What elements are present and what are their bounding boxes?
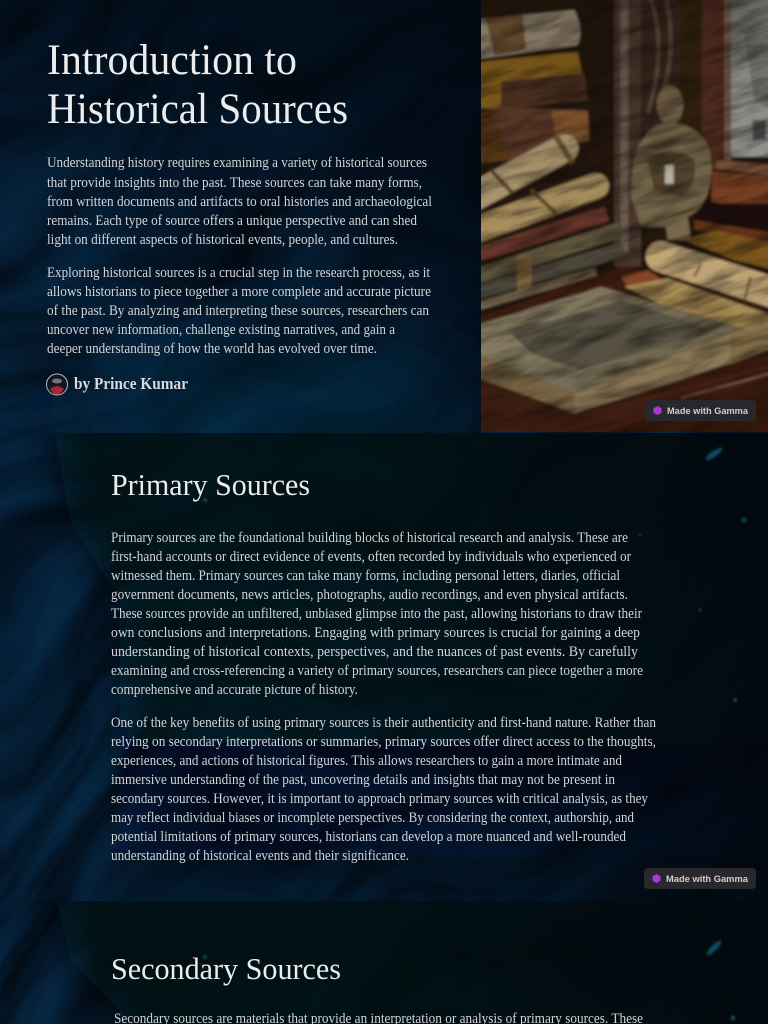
- statue: [657, 86, 683, 124]
- text block: intro paragraph 1: Understanding history requires examining a variety of historical sources: [47, 155, 427, 171]
- text block: intro paragraph 2: Exploring historical sources is a crucial step in the research process, as it: [47, 265, 430, 281]
- text block: intro paragraph 1: [47, 155, 432, 248]
- badge: made with gamma (middle): [644, 868, 756, 889]
- title: [47, 37, 348, 133]
- title: Introduction to: [47, 37, 297, 84]
- icon: gamma logo: [654, 406, 662, 415]
- text block: primary paragraph 1: witnessed them. Primary sources can take many forms, including personal letters, diaries, official: [111, 568, 620, 584]
- text block: primary paragraph 2: [111, 715, 657, 864]
- panel: secondary sources backdrop: [45, 901, 768, 1024]
- text block: primary paragraph 2: may reflect individual biases or incomplete perspectives. By considering the context, authorship, and: [111, 810, 635, 826]
- heading: primary sources: Primary Sources: [111, 467, 310, 502]
- text block: primary paragraph 2: understanding of historical events and their significance.: [111, 848, 409, 864]
- text block: intro paragraph 1: that provide insights into the past. These sources can take many forms,: [47, 175, 422, 191]
- text block: primary paragraph 1: Primary sources are the foundational building blocks of historical research and analysis. These are: [111, 530, 628, 546]
- text block: intro paragraph 2: of the past. By analyzing and interpreting these sources, researchers can: [47, 303, 430, 319]
- text block: primary paragraph 2: secondary sources. However, it is important to approach primary sources with critical analysis, as they: [111, 791, 649, 807]
- text block: primary paragraph 1: understanding of historical contexts, perspectives, and the nuances of past events. By carefully: [111, 644, 639, 660]
- text block: primary paragraph 1: These sources provide an unfiltered, unbiased glimpse into the past, allowing historians to draw their: [111, 606, 642, 622]
- text block: primary paragraph 1: comprehensive and accurate picture of history.: [111, 682, 358, 698]
- text block: primary paragraph 1: own conclusions and interpretations. Engaging with primary sources is crucial for gaining a deep: [111, 625, 640, 641]
- open book pages: [474, 287, 744, 393]
- text block: primary paragraph 1: examining and cross-referencing a variety of primary sources, researchers can piece together a more: [111, 663, 643, 679]
- text block: intro paragraph 1: from written documents and artifacts to oral histories and archaeological: [47, 194, 432, 210]
- icon: author avatar: [46, 374, 68, 395]
- text block: intro paragraph 2: uncover new information, challenge existing narratives, and gain a: [47, 322, 395, 338]
- author name: by Prince Kumar: [74, 374, 188, 393]
- text block: intro paragraph 2: [47, 265, 431, 357]
- title: Historical Sources: [47, 86, 348, 133]
- badge: made with gamma (top): [645, 400, 756, 421]
- table and scroll: [474, 267, 768, 440]
- badge: made with gamma (middle): Made with Gamma: [666, 874, 749, 885]
- text block: primary paragraph 1: first-hand accounts or direct evidence of events, often recorded by individuals who experienced or: [111, 549, 631, 565]
- panel: primary sources backdrop: [38, 433, 768, 901]
- text block: primary paragraph 1: [111, 530, 643, 698]
- photo: old books, scrolls and statue by a window: [481, 0, 768, 432]
- icon: gamma logo: [652, 874, 660, 883]
- text block: primary paragraph 2: potential limitations of primary sources, historians can develop a more nuanced and well-rounded: [111, 829, 627, 845]
- text block: primary paragraph 2: immersive understanding of the past, uncovering details and insights that may not be present in: [111, 772, 616, 788]
- text block: intro paragraph 1: light on different aspects of historical events, people, and cultures.: [47, 232, 398, 248]
- text block: primary paragraph 1: government documents, news articles, photographs, audio recordings, and even physical artifacts.: [111, 587, 628, 603]
- text block: primary paragraph 2: One of the key benefits of using primary sources is their authenticity and first-hand nature. Rather than: [111, 715, 657, 731]
- text block: primary paragraph 2: relying on secondary interpretations or summaries, primary sources offer direct access to the thoughts,: [111, 734, 656, 750]
- text block: primary paragraph 2: experiences, and actions of historical figures. This allows researchers to gain a more intimate and: [111, 753, 623, 769]
- text block: intro paragraph 1: remains. Each type of source offers a unique perspective and can shed: [47, 213, 418, 229]
- books stack: [474, 10, 580, 59]
- text block: intro paragraph 2: deeper understanding of how the world has evolved over time.: [47, 341, 377, 357]
- badge: made with gamma (top): Made with Gamma: [667, 406, 749, 417]
- text block: intro paragraph 2: allows historians to piece together a more complete and accurate picture: [47, 284, 431, 300]
- heading: secondary sources: Secondary Sources: [111, 951, 341, 986]
